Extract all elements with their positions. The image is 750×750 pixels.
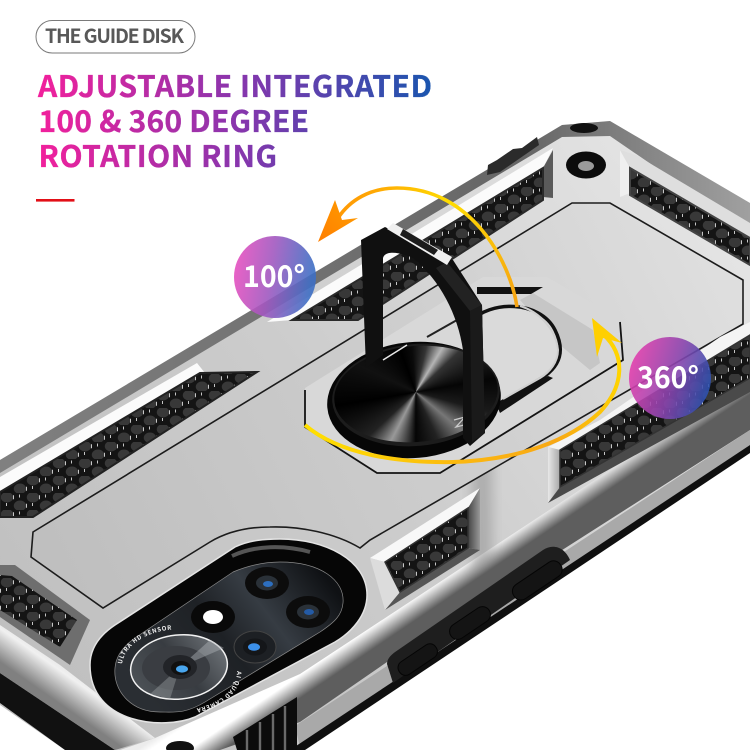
bottom grip stripes xyxy=(233,697,297,750)
top left wedge xyxy=(543,150,553,198)
top side buttons xyxy=(487,137,539,175)
lens right xyxy=(286,596,330,628)
plate inner black line xyxy=(427,320,457,337)
flash xyxy=(191,601,235,633)
lens lower xyxy=(234,631,276,663)
title: 100 & 360 DEGREE xyxy=(38,97,309,141)
arch top highlight xyxy=(387,223,452,265)
top right light band xyxy=(620,150,750,238)
badge: 360 degrees: 360° xyxy=(637,353,699,397)
strip: mid lower honeycomb xyxy=(385,508,468,592)
side black edge xyxy=(290,445,750,750)
outer top edge xyxy=(0,121,750,473)
text: ultra hd sensor: ULTRA HD SENSOR xyxy=(118,625,172,664)
badge: 100 degrees: 100° xyxy=(243,252,305,296)
arch front leg facet xyxy=(470,305,485,442)
bottom hole xyxy=(166,741,194,750)
arch facet xyxy=(436,262,482,311)
camera outer bump xyxy=(90,539,367,723)
disk top highlight xyxy=(383,345,407,360)
disk spun metal xyxy=(330,339,502,449)
side shadow xyxy=(472,440,492,570)
strip: left honeycomb xyxy=(0,372,257,517)
title: ROTATION RING xyxy=(38,132,277,176)
plate dark bar xyxy=(477,287,543,294)
strip: lower left honeycomb xyxy=(0,575,77,647)
white band left strip xyxy=(0,363,205,492)
short end highlight xyxy=(0,625,155,750)
stadium lower black bar xyxy=(497,376,553,413)
title: ADJUSTABLE INTEGRATED xyxy=(37,62,432,106)
title xyxy=(37,62,432,176)
button housing xyxy=(387,547,570,683)
arch top dark notch xyxy=(400,229,438,255)
lens top xyxy=(245,567,289,599)
corner lanyard hole xyxy=(566,152,606,178)
corner top hole xyxy=(570,123,598,133)
main lens xyxy=(127,630,231,704)
plate lower outline xyxy=(305,322,623,473)
top right wedge xyxy=(620,150,630,197)
strip: upper honeycomb xyxy=(292,168,543,320)
mid lower chevron: white top xyxy=(370,488,480,562)
back window xyxy=(31,203,743,608)
mid lower chevron: light side xyxy=(370,558,400,610)
mid lower chevron: lower edge xyxy=(385,548,480,610)
arrow: 100 degree arc xyxy=(318,188,517,307)
stadium ring recess xyxy=(470,306,560,403)
lower left black edge xyxy=(0,673,115,750)
mid lower chevron: dark side xyxy=(468,488,480,550)
camera module xyxy=(89,538,368,724)
plate inner edge xyxy=(520,293,600,370)
button: volume down xyxy=(395,641,440,678)
side grey strip xyxy=(295,430,750,747)
camera lens plate xyxy=(115,562,343,712)
stadium silver highlight xyxy=(503,306,558,399)
badge: 360 degrees xyxy=(629,337,711,419)
white band upper strip xyxy=(267,148,553,322)
disk rim xyxy=(328,337,504,453)
button: power xyxy=(509,558,565,603)
long white side band xyxy=(120,378,750,750)
text: ai quad camera: AI QUAD CAMERA xyxy=(196,671,242,712)
arrow: 360 degree arc xyxy=(305,318,622,462)
lower left chevron xyxy=(0,565,90,665)
disk base xyxy=(322,335,506,465)
right chevron: light side xyxy=(548,447,560,503)
right chevron: lower edge xyxy=(548,378,750,503)
badge: 100 degrees xyxy=(234,236,316,318)
octagon plate xyxy=(305,277,623,473)
ring holder xyxy=(305,223,623,473)
right chevron: white top xyxy=(548,322,750,450)
tag: the guide disk: THE GUIDE DISK xyxy=(45,20,185,49)
red accent line xyxy=(36,199,74,202)
strip: top right honeycomb xyxy=(630,168,750,265)
button: volume up xyxy=(446,604,494,642)
disk clip mark xyxy=(454,417,468,427)
strip: right lower honeycomb xyxy=(560,335,750,487)
camera gloss xyxy=(232,547,310,556)
arch ring xyxy=(361,227,485,446)
